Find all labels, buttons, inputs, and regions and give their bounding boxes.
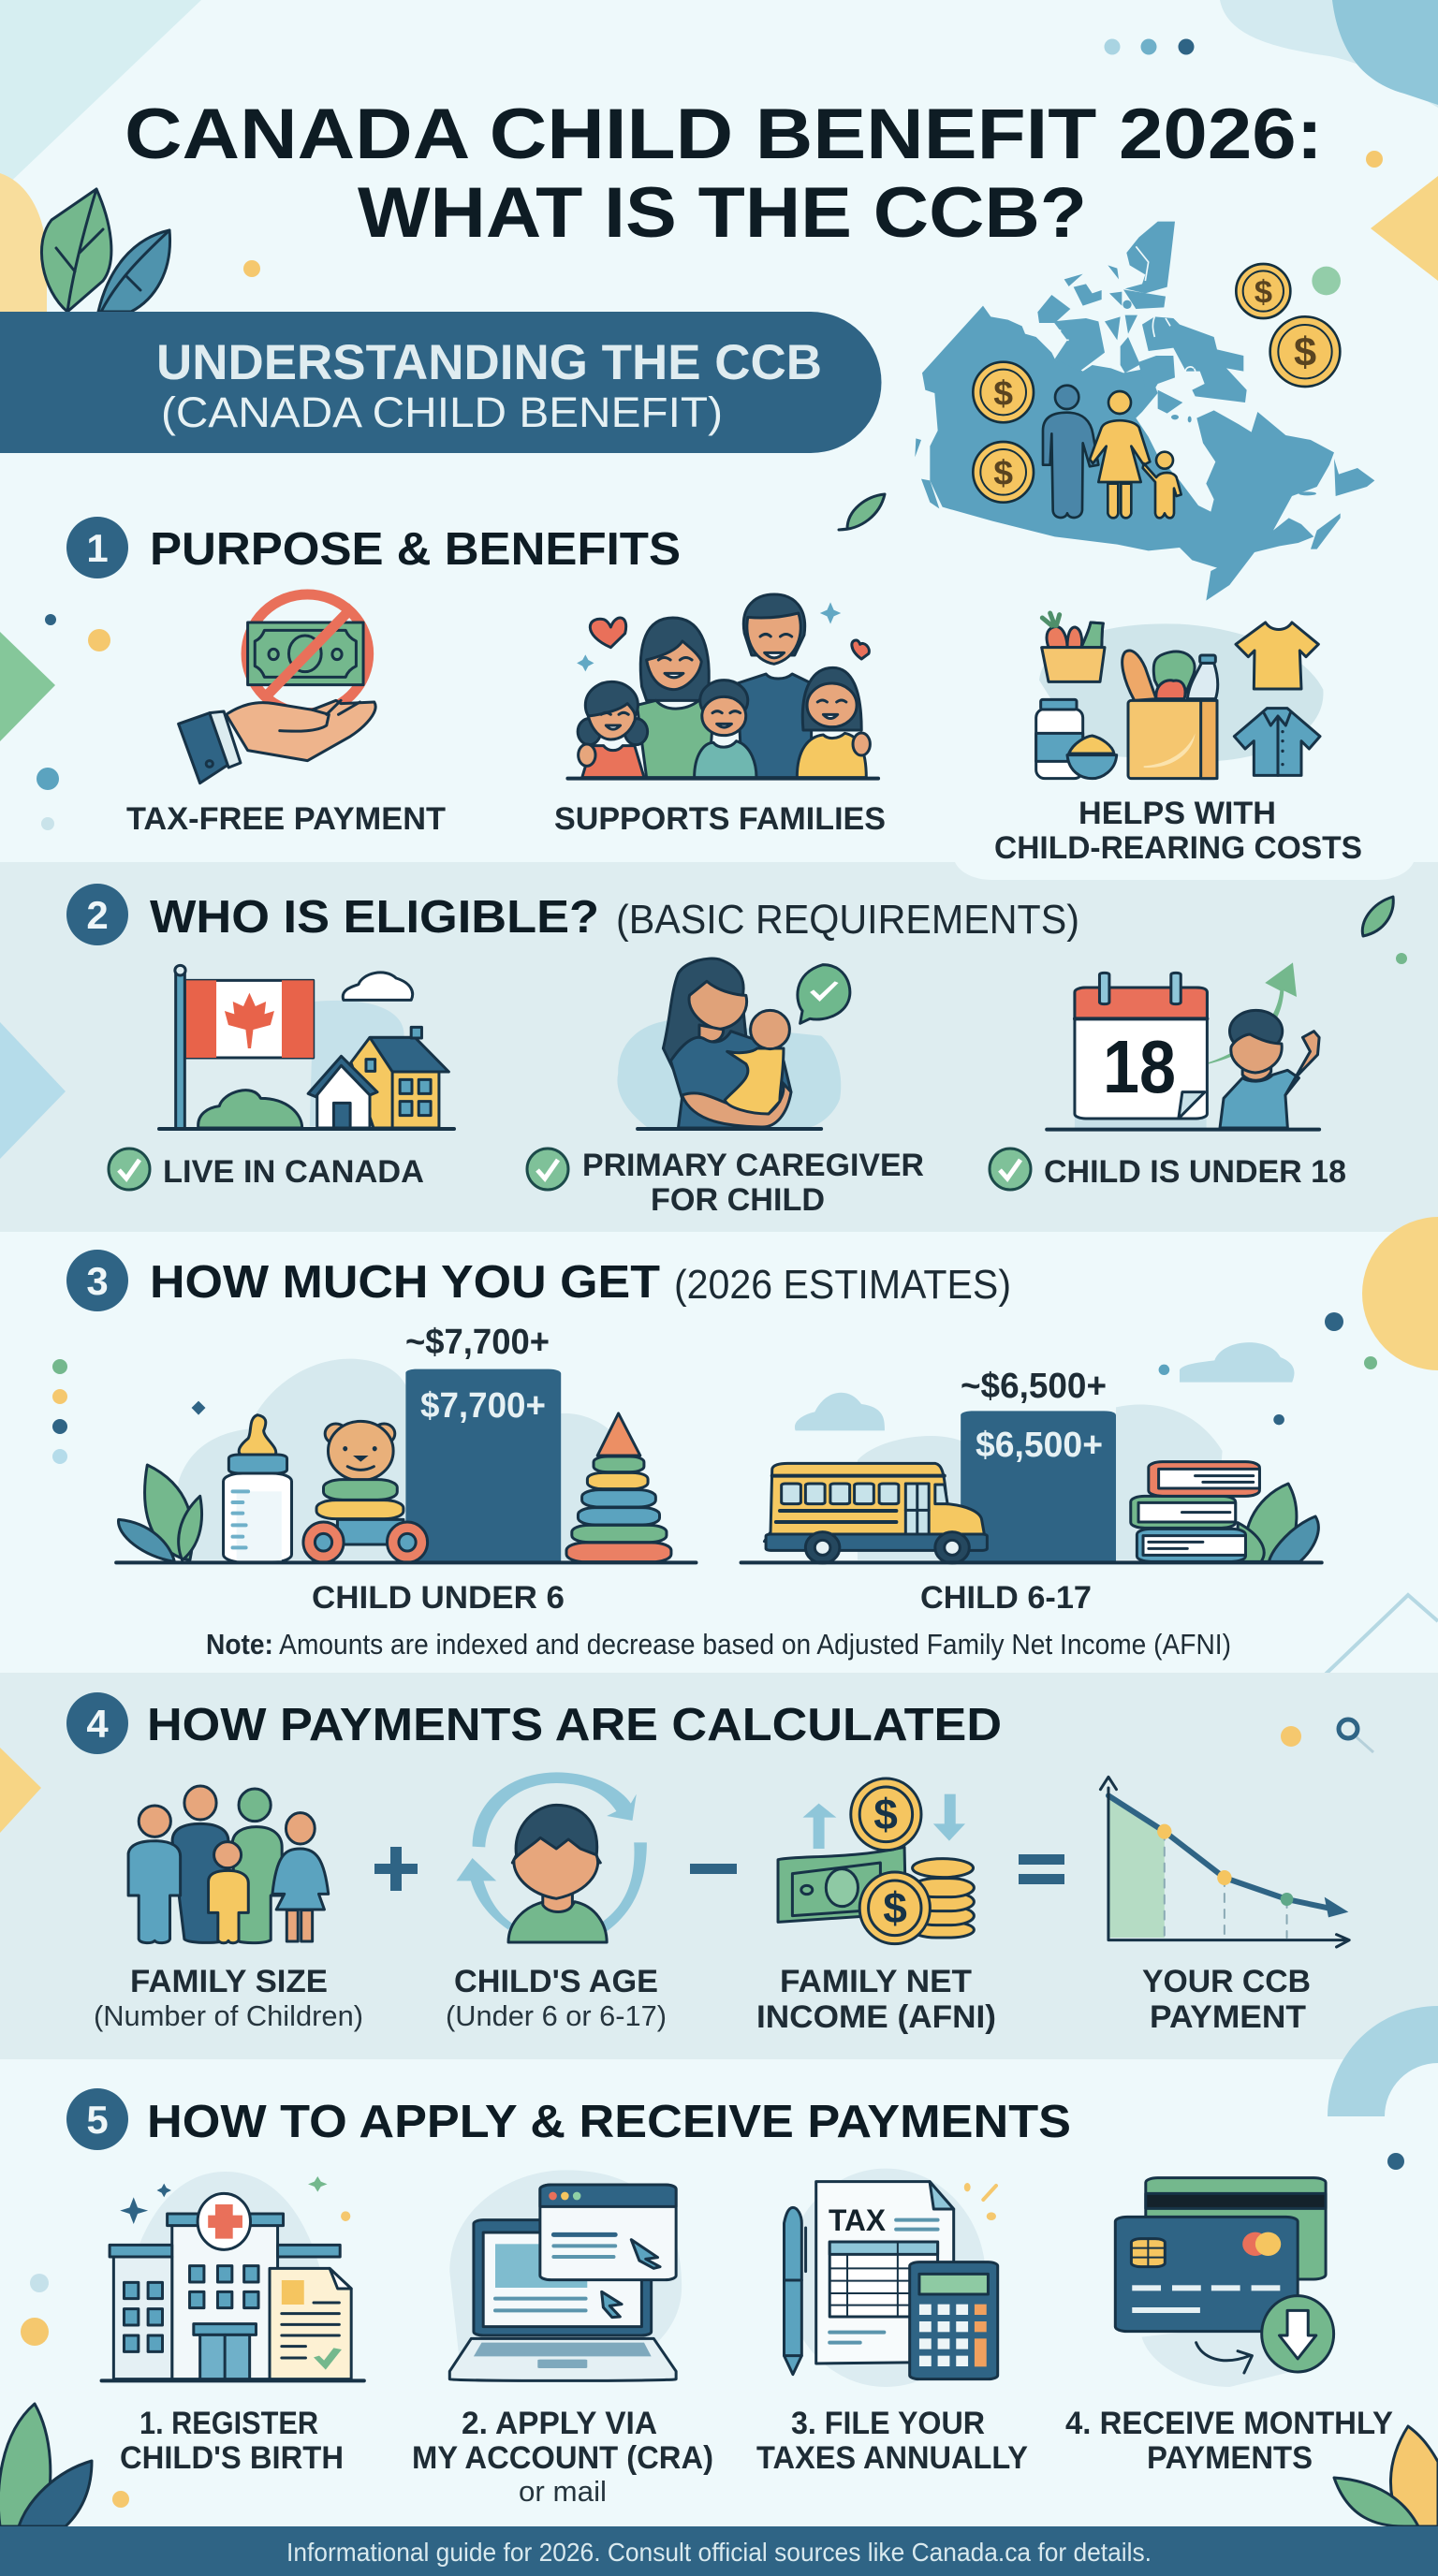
icon: leaves bottom left [0,2404,92,2526]
chart: child under 6 bar with toys: $7,700+ [420,1386,546,1426]
label with check: primary caregiver: PRIMARY CAREGIVER [582,1148,924,1183]
label: 2. APPLY VIA [462,2406,657,2441]
label with check: child under 18: CHILD IS UNDER 18 [1044,1154,1346,1190]
icon: equals sign [1019,1854,1064,1884]
coin 1: $ [993,373,1013,412]
coin 3 [1236,264,1290,318]
panel: section 3 how much you get [52,1217,1438,1683]
label: 3. FILE YOUR [791,2406,985,2441]
family silhouette [1043,386,1181,518]
label [1065,2406,1393,2476]
heading 3 [66,1250,1011,1311]
title [125,95,1323,253]
number on calendar: 18 [1103,1025,1176,1108]
icon: leaves bottom right [1334,2426,1438,2526]
heading 1: 1 [86,526,109,570]
label: INCOME (AFNI) [756,1999,996,2035]
icon: minus sign [690,1864,737,1874]
label [446,1964,667,2032]
panel: section 2 who is eligible [0,862,1438,1232]
label with check: primary caregiver: FOR CHILD [651,1182,825,1218]
icon: caregiver holding baby [617,959,850,1129]
chart: child 6-17 bar with bus and books: CHILD 6-17 [920,1580,1092,1616]
chart: child under 6 bar with toys: CHILD UNDER 6 [312,1580,565,1616]
coin 4: $ [1294,330,1316,375]
label [94,1964,363,2032]
heading 5: HOW TO APPLY & RECEIVE PAYMENTS [147,2097,1071,2147]
icon: plus sign [374,1847,418,1891]
coin 2 [973,442,1034,503]
chart: child under 6 bar with toys [116,1323,696,1616]
icon: money and coins [778,1778,974,1944]
background decoration: top [0,0,1438,312]
coin 4 [1270,316,1340,387]
label: (Number of Children) [94,1999,363,2032]
icon: bank cards and deposit arrow [1115,2178,1334,2387]
heading 3: 3 [86,1259,109,1303]
label [1142,1964,1311,2035]
title: WHAT IS THE CCB? [358,173,1087,253]
chart: child 6-17 bar with bus and books [741,1342,1322,1616]
label: CHILD'S BIRTH [120,2440,344,2476]
heading 3: HOW MUCH YOU GET [150,1257,660,1308]
heading 2: 2 [86,893,109,937]
label: MY ACCOUNT (CRA) [412,2440,713,2476]
label: PAYMENT [1150,1999,1306,2035]
label: TAXES ANNUALLY [756,2440,1028,2476]
panel: section 4 how payments are calculated [0,1673,1438,2059]
chart: declining payment line [1100,1777,1349,1947]
heading 4: HOW PAYMENTS ARE CALCULATED [147,1700,1002,1750]
heading 2: (BASIC REQUIREMENTS) [616,897,1079,943]
tax word: TAX [829,2203,887,2237]
banner: understanding the CCB [0,312,882,453]
icon: flag and house [159,965,454,1129]
coin 2: $ [993,453,1013,492]
label: TAX-FREE PAYMENT [126,801,446,837]
label [994,796,1362,866]
label: FAMILY NET [780,1964,972,1999]
heading 1 [66,517,681,578]
label: PAYMENTS [1147,2440,1313,2476]
footer [0,2526,1438,2576]
label: 1. REGISTER [139,2406,318,2441]
chart: child 6-17 bar with bus and books: ~$6,500+ [961,1367,1107,1406]
label: or mail [519,2475,607,2508]
heading 2: WHO IS ELIGIBLE? [150,892,599,943]
label: 4. RECEIVE MONTHLY [1065,2406,1393,2441]
coin symbols: $ [883,1883,907,1932]
icon: hospital and birth document [102,2172,364,2380]
label: SUPPORTS FAMILIES [554,801,886,837]
icon: map of Canada with family and coins [915,222,1374,601]
leaf: small near map [839,494,885,530]
label [756,2406,1028,2476]
icon: laptop with my account window [449,2170,682,2380]
left decorations [0,614,110,830]
label [756,1964,996,2035]
heading 3: (2026 ESTIMATES) [674,1262,1011,1308]
label: HELPS WITH [1078,796,1276,831]
coin symbols: $ [873,1790,898,1838]
icon: happy family [567,594,878,779]
heading 5: 5 [86,2098,109,2142]
icon: leaves top left [41,189,170,312]
icon: groceries and clothing [1036,613,1323,779]
icon: calendar 18 and child [1047,962,1319,1130]
note: Note: Amounts are indexed and decrease based on Adjusted Family Net Income (AFNI) [206,1628,1231,1661]
chart: child 6-17 bar with bus and books: $6,500+ [976,1426,1103,1465]
label: YOUR CCB [1142,1964,1311,1999]
panel: section 5 how to apply [21,2006,1438,2508]
label [120,2406,344,2476]
label: (Under 6 or 6-17) [446,1999,667,2032]
banner: understanding the CCB: UNDERSTANDING THE CCB [156,335,822,390]
coin symbols [873,1790,907,1932]
label [412,2406,713,2508]
heading 1: PURPOSE & BENEFITS [150,524,681,575]
heading 4: 4 [86,1702,109,1746]
label with check: primary caregiver [527,1148,924,1218]
coin 1 [973,362,1034,422]
title: CANADA CHILD BENEFIT 2026: [125,95,1323,174]
panel: section 1 purpose and benefits [0,517,1362,866]
footer: Informational guide for 2026. Consult official sources like Canada.ca for details. [286,2538,1152,2567]
banner: understanding the CCB: (CANADA CHILD BENEFIT) [161,388,723,436]
label: FAMILY SIZE [130,1964,328,1999]
icon: tax-free hand and money [179,594,375,783]
label: CHILD'S AGE [454,1964,658,1999]
chart: child under 6 bar with toys: ~$7,700+ [405,1323,550,1362]
heading 2 [66,884,1079,945]
icon: tax form, pen and calculator [785,2169,998,2387]
icon: family size [128,1786,329,1943]
label with check: live in Canada: LIVE IN CANADA [163,1154,424,1190]
coin 3: $ [1255,274,1272,310]
label: CHILD-REARING COSTS [994,830,1362,866]
icon: child's age with cycle arrows [456,1772,647,1942]
